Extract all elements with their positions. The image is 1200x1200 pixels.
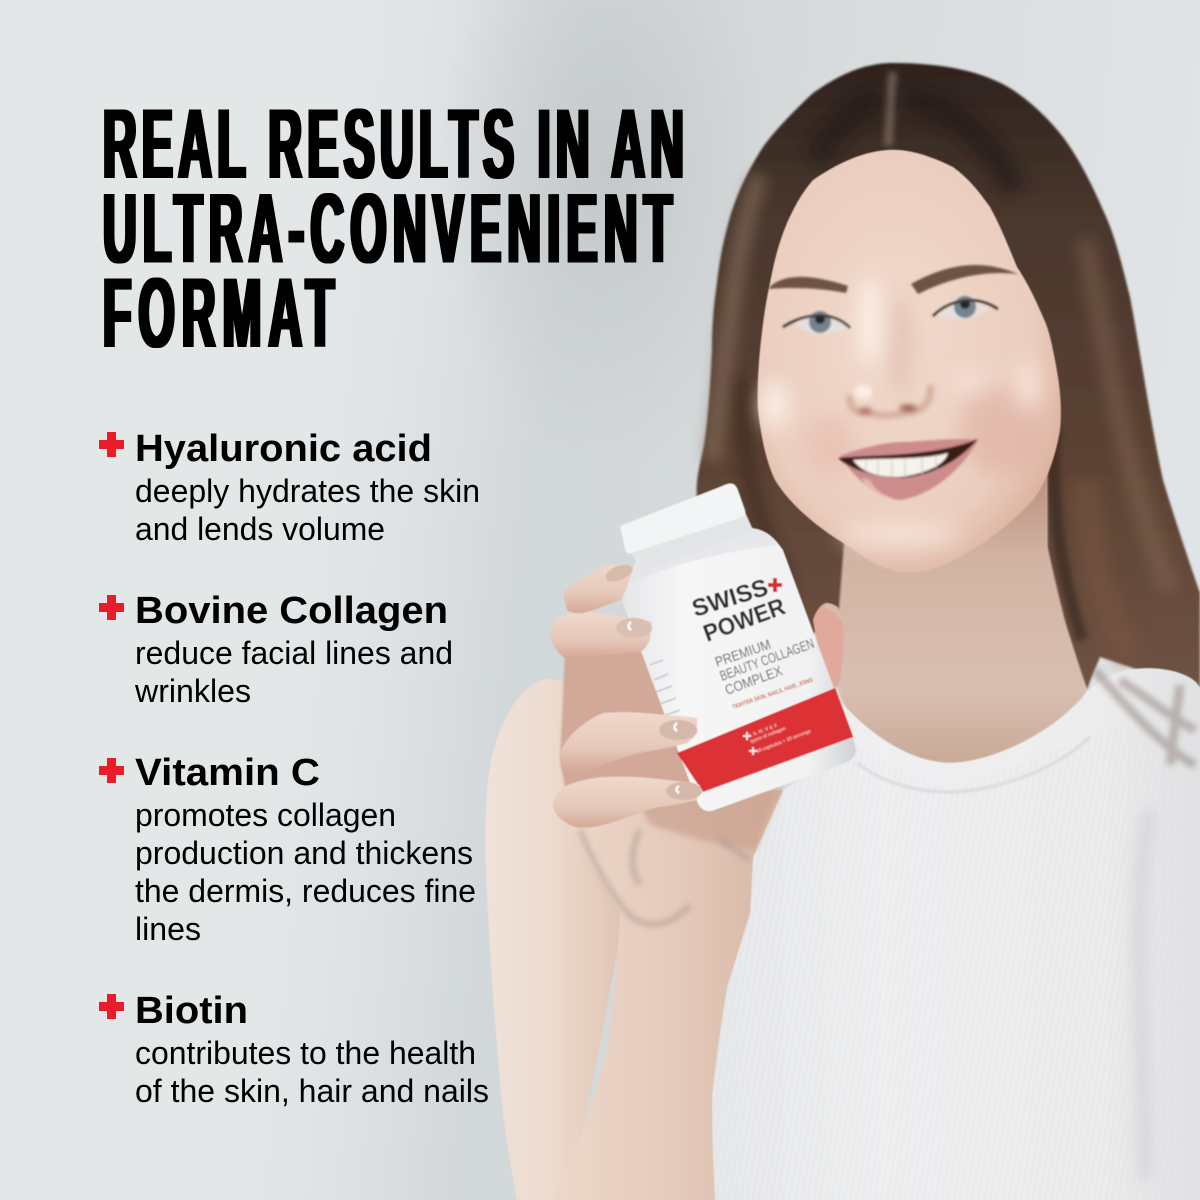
band text: types of collagen (750, 726, 787, 745)
finger 2 (550, 612, 652, 658)
item: vitamin c: lines (135, 911, 201, 947)
upper arm (485, 678, 625, 1200)
neck and chest (838, 470, 1087, 763)
bottle: TIGHTER SKIN, NAILS, HAIR, JOINS (732, 678, 814, 711)
item: vitamin c: Vitamin C (135, 752, 320, 794)
finger 3 (560, 712, 697, 771)
icon: red cross (99, 595, 124, 620)
icon: red cross (99, 758, 124, 783)
eyes (783, 296, 998, 334)
bottle brand and label text: SWISS (689, 574, 771, 623)
mouth (838, 439, 978, 500)
bottle neck (632, 512, 754, 572)
finger 1 (563, 564, 633, 613)
item: hyaluronic acid (99, 428, 480, 547)
fingers (550, 564, 700, 828)
title: FORMAT (103, 259, 334, 369)
item: biotin: of the skin, hair and nails (135, 1073, 489, 1109)
forearm and hand base (553, 780, 783, 1200)
eyebrows (768, 265, 1018, 294)
photo: woman holding bottle (485, 63, 1200, 1200)
nails (603, 561, 702, 800)
nose (850, 385, 930, 415)
band text: I, II, III, V & X (749, 722, 779, 739)
item: bovine collagen: wrinkles (134, 673, 251, 709)
item: vitamin c: the dermis, reduces fine (135, 873, 476, 909)
icon: red cross (99, 432, 124, 457)
title: REAL RESULTS IN AN (103, 90, 684, 200)
band text (743, 722, 812, 755)
back label fine print (650, 660, 680, 716)
palm behind bottle (560, 640, 710, 815)
item: biotin: Biotin (135, 990, 248, 1032)
item: hyaluronic acid: deeply hydrates the skin (135, 473, 480, 509)
bottle: PREMIUM (713, 636, 773, 670)
item: bovine collagen: Bovine Collagen (135, 590, 448, 632)
item: vitamin c (99, 752, 476, 947)
item: hyaluronic acid: and lends volume (135, 511, 385, 547)
face shading (761, 275, 1040, 549)
bottle body (623, 528, 856, 811)
item: hyaluronic acid: Hyaluronic acid (135, 428, 432, 470)
band text: 90 capsules + 30 servings (756, 728, 812, 755)
bottle (620, 483, 856, 811)
item: bovine collagen: reduce facial lines and (135, 635, 453, 671)
item: biotin: contributes to the health (135, 1035, 476, 1071)
title: ULTRA-CONVENIENT (103, 174, 672, 284)
hair (697, 63, 1200, 690)
finger 4 (553, 777, 700, 828)
item: biotin (99, 990, 489, 1109)
thumb (813, 603, 844, 690)
icon: red cross (99, 994, 124, 1019)
brand cross (768, 578, 782, 592)
hand shadow near bottle (640, 785, 783, 850)
item: vitamin c: production and thickens (135, 835, 473, 871)
item: vitamin c: promotes collagen (135, 797, 396, 833)
hand wrinkles (580, 830, 750, 924)
bottle: BEAUTY COLLAGEN (718, 635, 816, 684)
item: bovine collagen (99, 590, 453, 709)
tank top (712, 668, 1200, 1200)
title (103, 90, 684, 369)
collar seam (857, 737, 1090, 792)
bottle: POWER (700, 593, 789, 648)
bottle cap (620, 483, 745, 554)
hair strands over shoulder (1095, 670, 1195, 765)
bottle shoulder shading (630, 528, 778, 583)
bottle: COMPLEX (723, 662, 785, 698)
red band (677, 688, 853, 792)
face (758, 150, 1061, 573)
